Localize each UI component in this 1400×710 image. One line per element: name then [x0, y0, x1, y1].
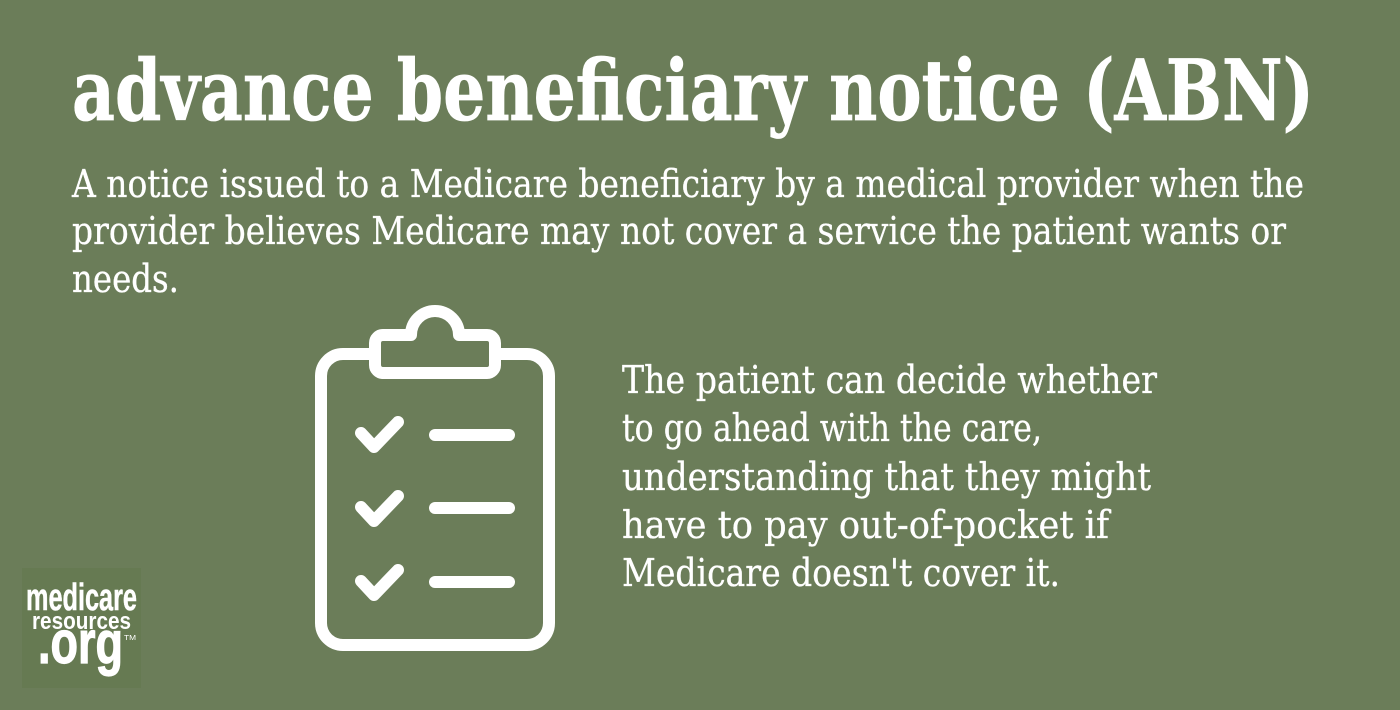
side explanation text: The patient can decide whether	[622, 358, 1158, 402]
check item 3	[361, 570, 509, 595]
side explanation text: understanding that they might	[622, 455, 1151, 499]
side explanation text: Medicare doesn't cover it.	[622, 551, 1060, 595]
logo: medicareresources.org: TM	[124, 635, 136, 642]
check item 2	[361, 496, 509, 521]
side explanation text	[622, 358, 1158, 595]
check item 1	[361, 422, 509, 447]
logo: medicareresources.org: .org	[38, 609, 123, 676]
side explanation text: to go ahead with the care,	[622, 406, 1042, 450]
clipboard clip	[375, 311, 495, 373]
definition text block: needs.	[72, 257, 179, 301]
clipboard board	[321, 354, 549, 645]
logo: medicareresources.org	[22, 568, 141, 688]
logo: medicareresources.org: medicare	[26, 577, 137, 619]
side explanation text: have to pay out-of-pocket if	[622, 503, 1112, 547]
icon: clipboard checklist	[321, 311, 549, 645]
definition text block	[71, 162, 1304, 301]
logo: medicareresources.org: resources	[32, 608, 131, 635]
